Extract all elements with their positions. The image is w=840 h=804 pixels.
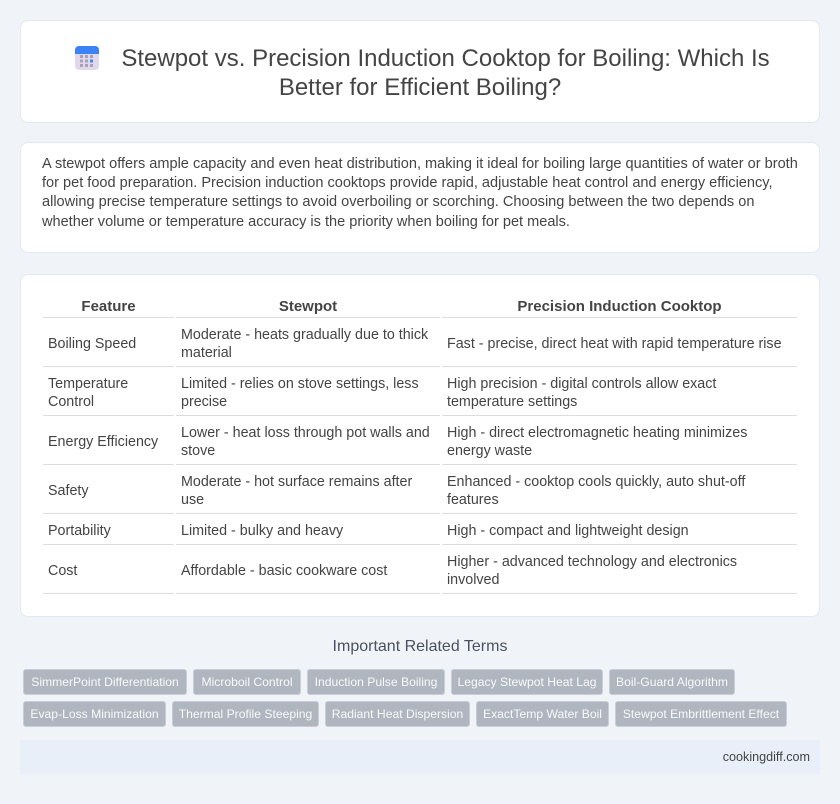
tag	[193, 669, 301, 695]
tag	[325, 701, 470, 727]
row: boiling speed: Moderate - heats gradually due to thick	[181, 327, 428, 343]
tag: Stewpot Embrittlement Effect	[623, 707, 779, 721]
row: boiling speed: material	[181, 345, 232, 361]
tag: Microboil Control	[201, 675, 293, 689]
row: temperature control: Temperature	[48, 376, 128, 392]
row: energy efficiency: High - direct electromagnetic heating minimizes	[447, 425, 747, 441]
row: portability	[43, 523, 797, 545]
tag	[609, 669, 735, 695]
row: temperature control: High precision - digital controls allow exact	[447, 376, 716, 392]
tag: Thermal Profile Steeping	[179, 707, 312, 721]
table header: Stewpot	[279, 298, 337, 315]
title: Better for Efficient Boiling?	[279, 74, 561, 101]
tag list: related terms	[23, 669, 787, 727]
row: safety: Moderate - hot surface remains after	[181, 474, 412, 490]
title	[121, 45, 770, 101]
footer	[20, 740, 820, 774]
tag: Legacy Stewpot Heat Lag	[457, 675, 597, 689]
row: energy efficiency: stove	[181, 443, 215, 459]
icon: calendar	[75, 46, 99, 70]
row: cost	[43, 554, 797, 594]
tag: Evap-Loss Minimization	[30, 707, 159, 721]
text block: summary: whether volume or temperature accuracy is the priority when boiling for pet meals.	[42, 214, 570, 230]
row: portability: Limited - bulky and heavy	[181, 523, 343, 539]
row: temperature control	[43, 376, 797, 416]
text block: summary: allowing precise temperature settings to avoid overboiling or scorching. Choosing between the two depends on	[42, 194, 754, 210]
row: safety	[43, 474, 797, 514]
row: boiling speed: Fast - precise, direct heat with rapid temperature rise	[447, 336, 782, 352]
row: boiling speed: Boiling Speed	[48, 336, 136, 352]
row: safety: use	[181, 492, 204, 508]
text block: summary	[42, 156, 798, 230]
row: energy efficiency: Energy Efficiency	[48, 434, 158, 450]
tag	[172, 701, 319, 727]
heading: important related terms: Important Related Terms	[333, 638, 507, 655]
footer source text: cookingdiff.com	[723, 750, 810, 764]
row: temperature control: precise	[181, 394, 227, 410]
title: Stewpot vs. Precision Induction Cooktop for Boiling: Which Is	[121, 45, 770, 72]
row: energy efficiency: Lower - heat loss through pot walls and	[181, 425, 430, 441]
comparison table	[43, 298, 797, 594]
table header: Precision Induction Cooktop	[517, 298, 722, 315]
tag: ExactTemp Water Boil	[483, 707, 602, 721]
row: portability: High - compact and lightweight design	[447, 523, 689, 539]
row: temperature control: Limited - relies on stove settings, less	[181, 376, 419, 392]
tag: Boil-Guard Algorithm	[616, 675, 728, 689]
tag: Radiant Heat Dispersion	[332, 707, 463, 721]
panel: comparison table card	[20, 274, 820, 617]
row: safety: Enhanced - cooktop cools quickly, auto shut-off	[447, 474, 745, 490]
text block: summary: for pet food preparation. Precision induction cooktops provide rapid, adjustable heat control and energy efficiency,	[42, 175, 772, 191]
row: portability: Portability	[48, 523, 111, 539]
tag	[23, 669, 187, 695]
row: temperature control: Control	[48, 394, 94, 410]
row: cost: Higher - advanced technology and electronics	[447, 554, 737, 570]
row: boiling speed	[43, 327, 797, 367]
text block: summary: A stewpot offers ample capacity and even heat distribution, making it ideal for boiling large quantities of water or broth	[42, 156, 798, 172]
panel: summary card	[20, 142, 820, 253]
row: energy efficiency	[43, 425, 797, 465]
tag	[307, 669, 445, 695]
table header	[43, 298, 797, 318]
tag	[451, 669, 603, 695]
tag	[615, 701, 787, 727]
panel: title card	[20, 20, 820, 123]
tag: Induction Pulse Boiling	[315, 675, 437, 689]
row: safety: Safety	[48, 483, 89, 499]
row: cost: involved	[447, 572, 499, 588]
row: temperature control: temperature settings	[447, 394, 577, 410]
row: energy efficiency: energy waste	[447, 443, 532, 459]
tag	[476, 701, 609, 727]
row: safety: features	[447, 492, 499, 508]
row: cost: Affordable - basic cookware cost	[181, 563, 387, 579]
tag	[23, 701, 166, 727]
table header: Feature	[81, 298, 136, 315]
tag: SimmerPoint Differentiation	[31, 675, 179, 689]
row: cost: Cost	[48, 563, 77, 579]
